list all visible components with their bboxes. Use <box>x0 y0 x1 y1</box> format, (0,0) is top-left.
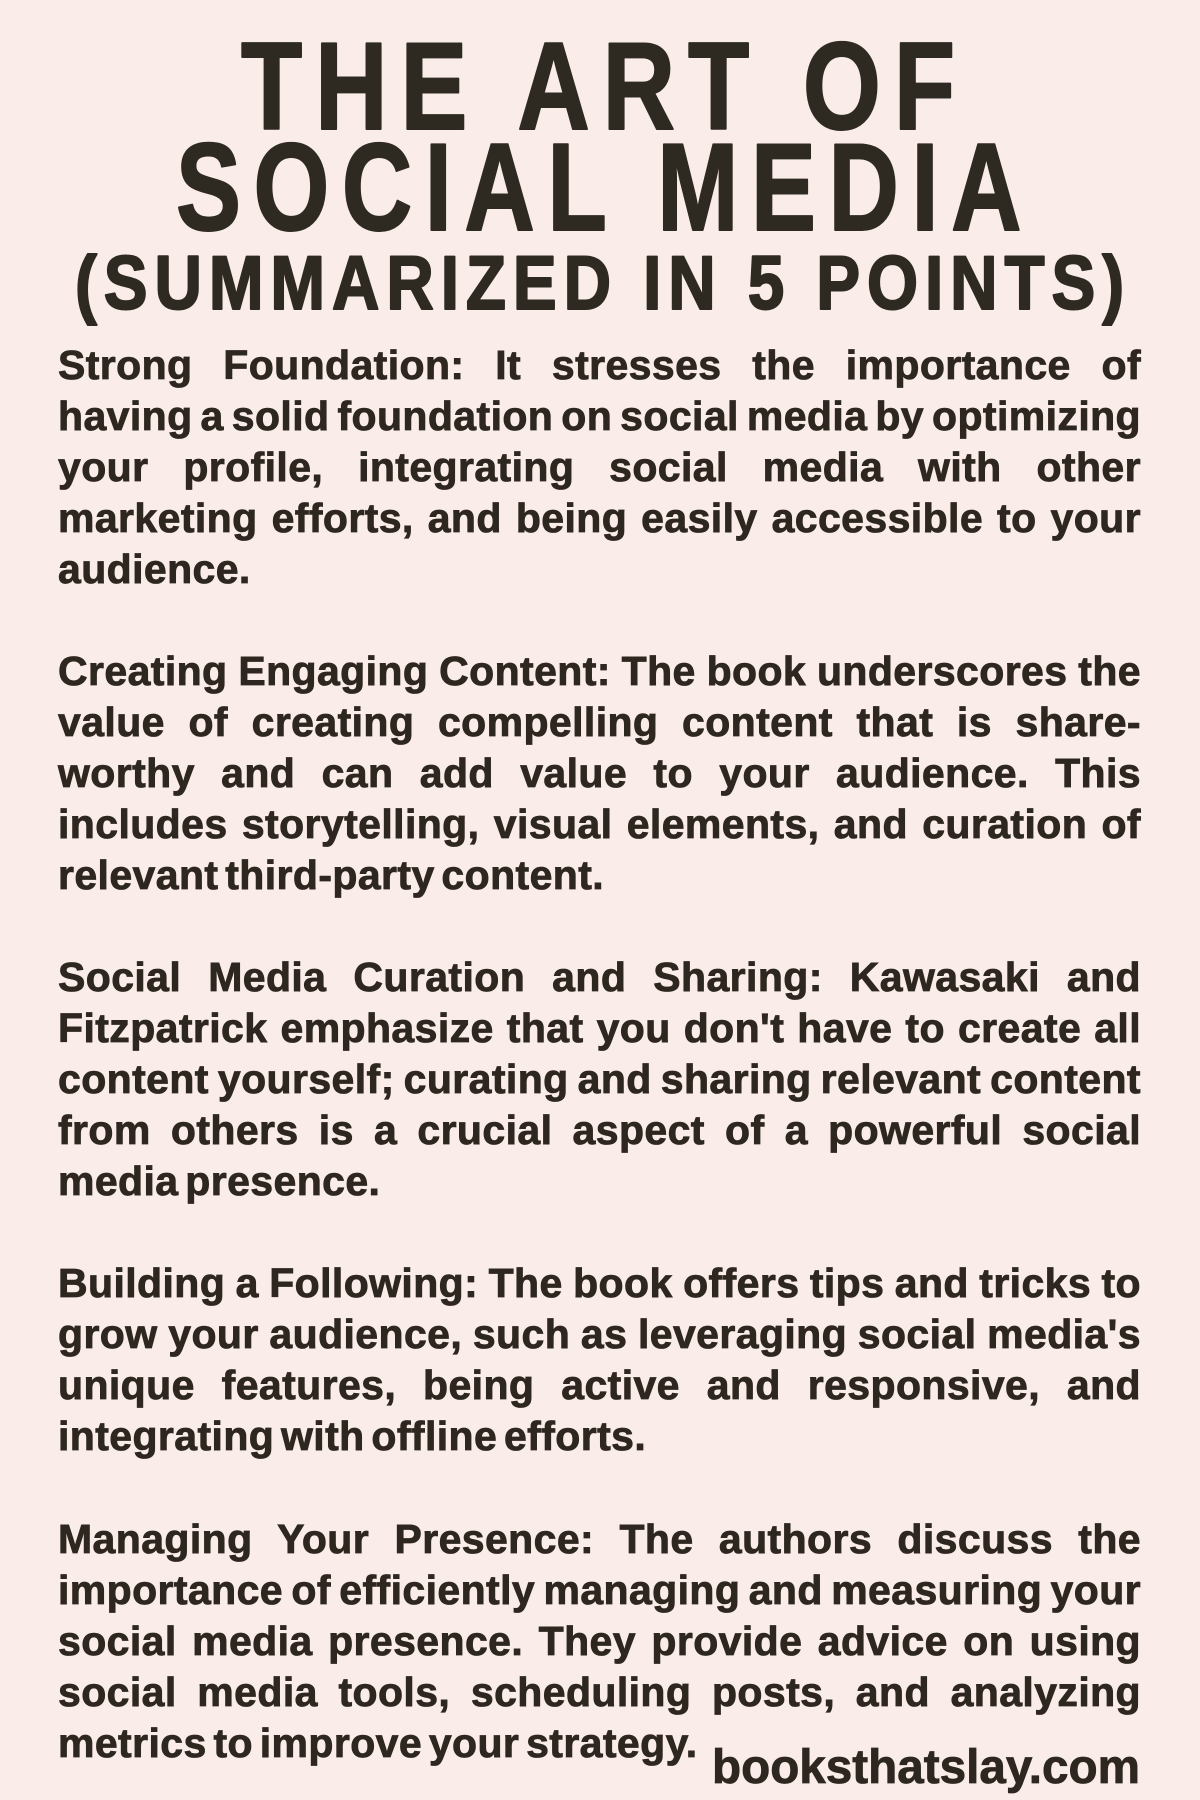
point 4: building a following: Building a Following: The book offers tips and tricks to <box>58 1260 1141 1306</box>
point 5: managing your presence <box>58 1516 1141 1766</box>
point 2: creating engaging content: relevant third-party content. <box>58 852 604 898</box>
point 2: creating engaging content: value of creating compelling content that is share- <box>58 699 1141 745</box>
point 4: building a following: grow your audience, such as leveraging social media's <box>58 1311 1141 1357</box>
point 4: building a following: unique features, being active and responsive, and <box>58 1362 1141 1408</box>
point 3: social media curation and sharing: content yourself; curating and sharing relevant content <box>58 1056 1141 1102</box>
point 2: creating engaging content: includes storytelling, visual elements, and curation of <box>58 801 1141 847</box>
point 5: managing your presence: Managing Your Presence: The authors discuss the <box>58 1516 1141 1562</box>
point 2: creating engaging content <box>57 648 1141 898</box>
point 1: strong foundation: your profile, integrating social media with other <box>58 444 1141 490</box>
point 5: managing your presence: metrics to improve your strategy. <box>58 1720 698 1766</box>
point 5: managing your presence: importance of efficiently managing and measuring your <box>58 1567 1141 1613</box>
title <box>75 18 1131 326</box>
point 1: strong foundation: having a solid foundation on social media by optimizing <box>58 393 1141 439</box>
point 1: strong foundation: Strong Foundation: It stresses the importance of <box>58 342 1141 388</box>
point 3: social media curation and sharing: from others is a crucial aspect of a powerful social <box>58 1107 1141 1153</box>
point 3: social media curation and sharing: Fitzpatrick emphasize that you don't have to create all <box>58 1005 1141 1051</box>
point 2: creating engaging content: worthy and can add value to your audience. This <box>58 750 1141 796</box>
point 3: social media curation and sharing: Social Media Curation and Sharing: Kawasaki and <box>58 954 1141 1000</box>
title line 1: THE ART OF <box>241 18 968 156</box>
point 3: social media curation and sharing: media presence. <box>58 1158 380 1204</box>
point 1: strong foundation <box>58 342 1142 592</box>
point 1: strong foundation: audience. <box>58 546 251 592</box>
point 2: creating engaging content: Creating Engaging Content: The book underscores the <box>58 648 1141 694</box>
point 1: strong foundation: marketing efforts, and being easily accessible to your <box>58 495 1141 541</box>
point 3: social media curation and sharing <box>58 954 1141 1204</box>
point 4: building a following: integrating with offline efforts. <box>58 1413 646 1459</box>
point 4: building a following <box>58 1260 1141 1459</box>
point 5: managing your presence: social media presence. They provide advice on using <box>58 1618 1141 1664</box>
footer website: booksthatslay.com <box>712 1741 1140 1794</box>
point 5: managing your presence: social media tools, scheduling posts, and analyzing <box>58 1669 1141 1715</box>
